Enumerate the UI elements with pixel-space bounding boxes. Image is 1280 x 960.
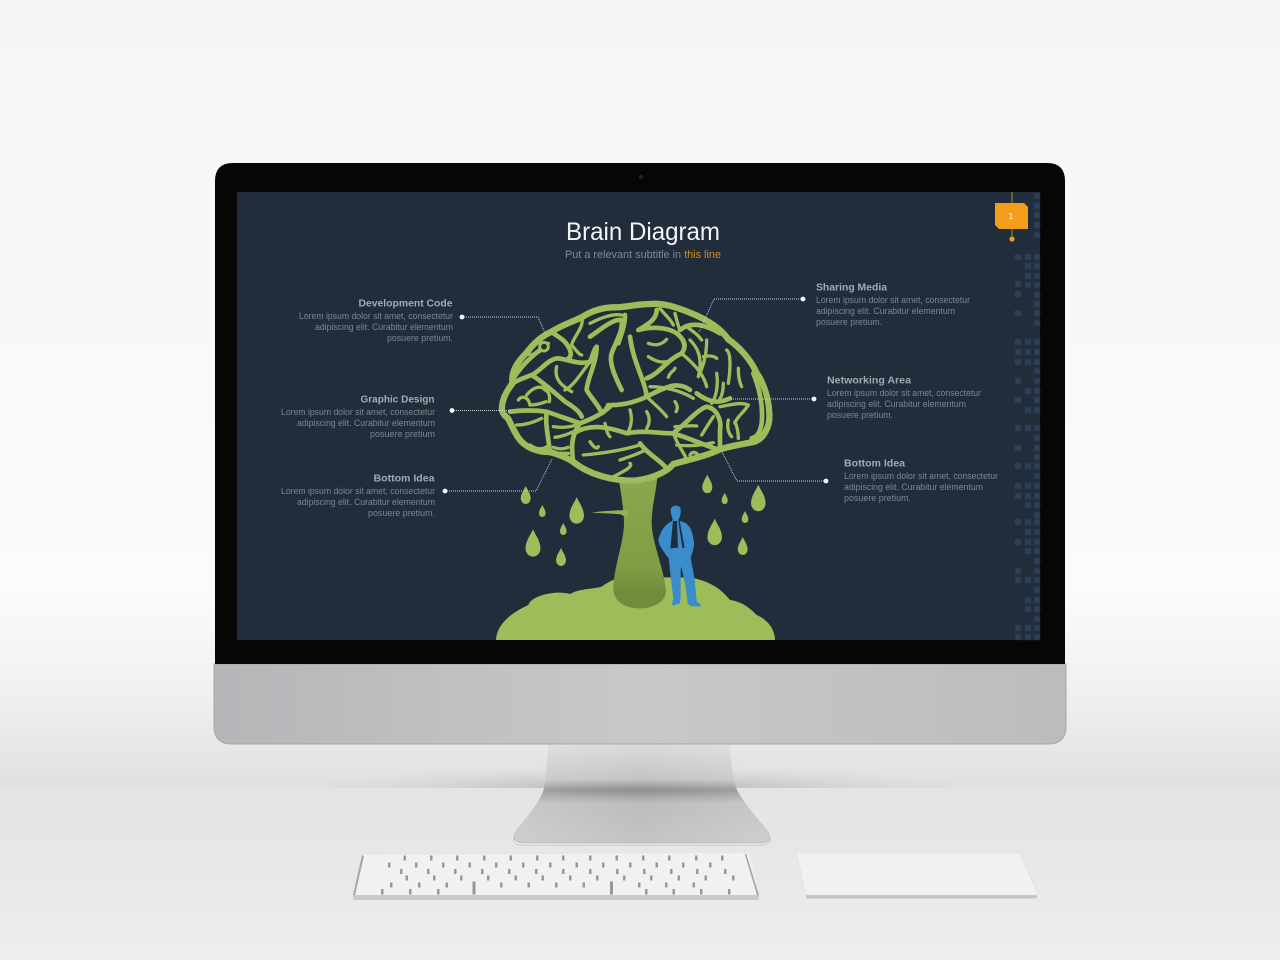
text block: Sharing Media: Lorem ipsum dolor sit amet, consectetur	[816, 295, 970, 305]
branch	[592, 510, 629, 518]
text block: Bottom Idea right: adipiscing elit. Curabitur elementum	[844, 482, 983, 492]
brain junction ring	[540, 342, 548, 351]
camera	[638, 174, 644, 180]
text block: Graphic Design: Lorem ipsum dolor sit amet, consectetur	[281, 407, 435, 417]
text block: Networking Area: Lorem ipsum dolor sit amet, consectetur	[827, 388, 981, 398]
leader: Networking Area	[730, 397, 816, 401]
man in suit	[658, 506, 701, 607]
brain main folds	[510, 310, 762, 468]
text block: Sharing Media: posuere pretium.	[816, 317, 882, 327]
text block: Bottom Idea left	[281, 472, 435, 518]
text block: Sharing Media	[816, 282, 970, 327]
text block: Bottom Idea left: posuere pretium.	[368, 508, 435, 518]
page badge	[995, 192, 1028, 242]
text block: Bottom Idea left: adipiscing elit. Curabitur elementum	[297, 497, 435, 507]
text block: Development Code: adipiscing elit. Curabitur elementum	[315, 322, 453, 332]
text block: Graphic Design: posuere pretium	[370, 429, 435, 439]
monitor bezel	[215, 163, 1065, 664]
key gaps	[381, 856, 734, 894]
dot pattern strip	[1015, 193, 1040, 640]
text block: Sharing Media: adipiscing elit. Curabitur elementum	[816, 306, 955, 316]
text block: Bottom Idea left: Lorem ipsum dolor sit amet, consectetur	[281, 486, 435, 496]
text block: Development Code	[299, 298, 453, 343]
text block: Bottom Idea right: Lorem ipsum dolor sit amet, consectetur	[844, 471, 998, 481]
title: Brain Diagram	[566, 218, 720, 246]
leader: Bottom Idea right	[722, 452, 828, 483]
text block: Networking Area: adipiscing elit. Curabitur elementum	[827, 399, 966, 409]
text block: Development Code: Development Code	[358, 298, 453, 310]
text block: Graphic Design: adipiscing elit. Curabitur elementum	[297, 418, 435, 428]
shirt and tie	[670, 521, 678, 548]
text block: Networking Area	[827, 374, 981, 420]
leader: Graphic Design	[450, 408, 512, 413]
text block: Bottom Idea right: posuere pretium.	[844, 493, 911, 503]
keyboard	[353, 853, 759, 900]
text block: Bottom Idea right: Bottom Idea	[844, 458, 905, 470]
brain outline	[502, 304, 769, 481]
tree trunk	[592, 477, 666, 608]
panel: slide screen	[237, 192, 1040, 640]
mound	[496, 577, 775, 640]
monitor body	[214, 163, 1066, 744]
monitor chin	[214, 664, 1066, 744]
text block: Sharing Media: Sharing Media	[816, 282, 887, 294]
brain	[502, 304, 769, 481]
page badge: 1	[1009, 212, 1014, 221]
text block: Development Code: posuere pretium.	[387, 333, 453, 343]
brain fine folds	[517, 308, 748, 477]
water drops	[521, 475, 766, 566]
text block: Bottom Idea right	[844, 458, 998, 503]
trackpad	[797, 853, 1037, 898]
leader: Development Code	[460, 315, 546, 335]
subtitle: Put a relevant subtitle in this line	[565, 249, 721, 261]
text block: Networking Area: Networking Area	[827, 374, 911, 386]
text block: Graphic Design	[281, 394, 435, 439]
monitor stand	[513, 743, 770, 845]
leader: Bottom Idea left	[443, 459, 552, 493]
text block: Graphic Design: Graphic Design	[360, 394, 434, 406]
text block: Development Code: Lorem ipsum dolor sit amet, consectetur	[299, 311, 453, 321]
leader: Sharing Media	[699, 297, 805, 332]
text block: Networking Area: posuere pretium.	[827, 410, 893, 420]
text block: Bottom Idea left: Bottom Idea	[374, 472, 435, 484]
